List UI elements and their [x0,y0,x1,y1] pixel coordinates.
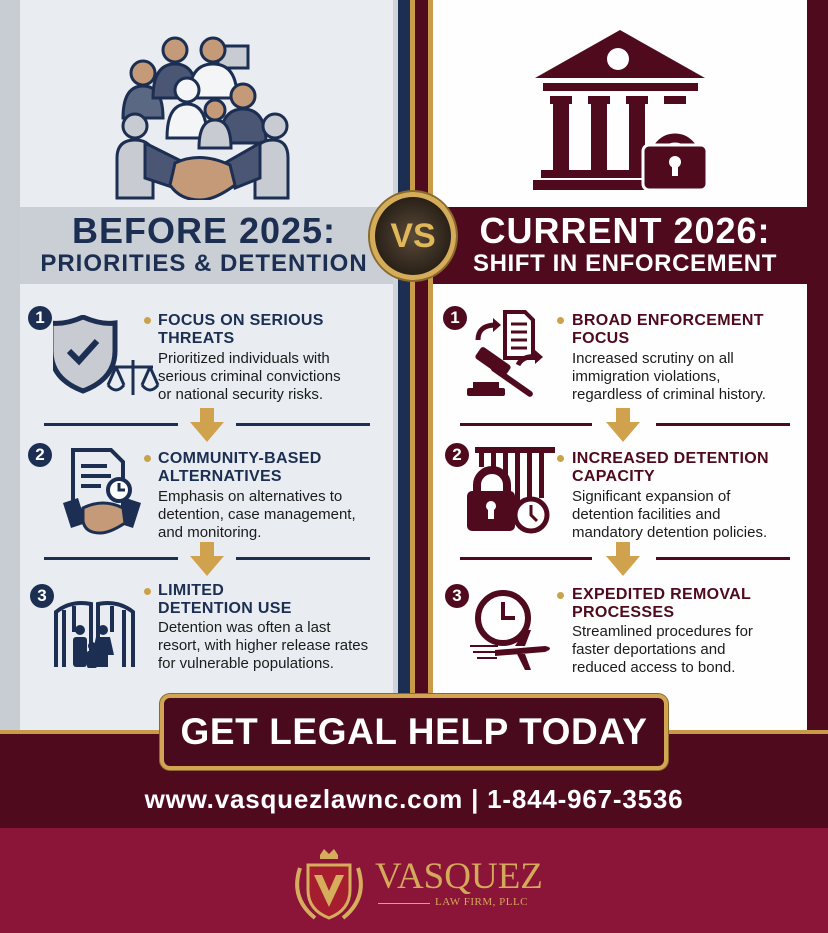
left item 2: Emphasis on alternatives to [158,488,342,505]
left item 1: serious criminal convictions [158,368,341,385]
divider arrow right 1 [460,408,790,442]
divider arrow right 2 [460,542,790,576]
center divider [393,0,433,693]
left item 1 [28,306,341,403]
heading: before 2025: BEFORE 2025: [72,210,336,251]
bottom contact band [0,730,828,828]
left item 1: 1 [35,308,45,327]
right item 2: CAPACITY [572,468,655,485]
heading: before 2025: PRIORITIES & DETENTION [40,250,368,277]
header band left [20,207,393,284]
right item 1: BROAD ENFORCEMENT [572,312,764,329]
icon: community handshake [116,36,290,200]
right item 2: 2 [452,445,462,464]
right item 3: EXPEDITED REMOVAL [572,586,751,603]
left item 1: THREATS [158,330,234,347]
left item 2: COMMUNITY-BASED [158,450,322,467]
icon: courthouse with lock [533,30,706,190]
right item 3: 3 [452,586,462,605]
heading: current 2026 [473,210,777,277]
right outer strip [807,0,828,734]
left item 3: 3 [37,586,47,605]
right item 1: regardless of criminal history. [572,386,766,403]
left item 2: detention, case management, [158,506,356,523]
left item 3: for vulnerable populations. [158,655,334,672]
right item 3: Streamlined procedures for [572,623,753,640]
left item 1: or national security risks. [158,386,323,403]
right item 3: PROCESSES [572,604,674,621]
icon: gavel and documents [467,310,543,397]
cta button: GET LEGAL HELP TODAY [180,711,648,752]
left item 1: Prioritized individuals with [158,350,330,367]
divider arrow left 2 [44,542,370,576]
heading: current 2026: CURRENT 2026: [479,210,771,251]
left item 2 [28,443,356,541]
left item 1: FOCUS ON SERIOUS [158,312,324,329]
right item 1: 1 [450,308,460,327]
right panel: current 2026 [433,0,807,734]
left item 3: resort, with higher release rates [158,637,368,654]
icon: shield with scales [53,315,160,395]
contact line: www.vasquezlawnc.com | 1-844-967-3536 [145,784,683,814]
right item 1: Increased scrutiny on all [572,350,734,367]
icon: lock bars clock [467,447,555,534]
header band right [433,207,807,284]
heading: current 2026: SHIFT IN ENFORCEMENT [473,250,777,277]
divider arrow left 1 [44,408,370,442]
left item 3 [30,582,368,672]
logo wordmark: VASQUEZ [375,856,543,897]
icon: clock and plane [470,590,550,670]
right item 2: INCREASED DETENTION [572,450,769,467]
right item 1 [443,306,766,403]
left item 2: and monitoring. [158,524,261,541]
left outer strip [0,0,20,734]
left item 3: DETENTION USE [158,600,292,617]
right item 2 [445,443,769,541]
right item 2: detention facilities and [572,506,720,523]
cta button [160,694,668,770]
left item 3: LIMITED [158,582,224,599]
right item 3: reduced access to bond. [572,659,735,676]
right item 2: Significant expansion of [572,488,730,505]
left item 2: 2 [35,445,45,464]
right item 1: FOCUS [572,330,630,347]
icon: gate with family [54,601,135,668]
panel: before 2025 [20,0,394,730]
heading: before 2025 [40,210,368,277]
right item 3: faster deportations and [572,641,725,658]
vs badge [370,192,456,280]
logo: LAW FIRM, PLLC [435,896,528,908]
left item 3: Detention was often a last [158,619,331,636]
right item 3 [445,584,753,676]
logo [295,849,543,920]
right item 1: immigration violations, [572,368,720,385]
icon: crest [295,849,363,920]
right item 2: mandatory detention policies. [572,524,767,541]
icon: document handshake [63,448,141,534]
vs badge: VS [390,217,436,255]
left item 2: ALTERNATIVES [158,468,282,485]
